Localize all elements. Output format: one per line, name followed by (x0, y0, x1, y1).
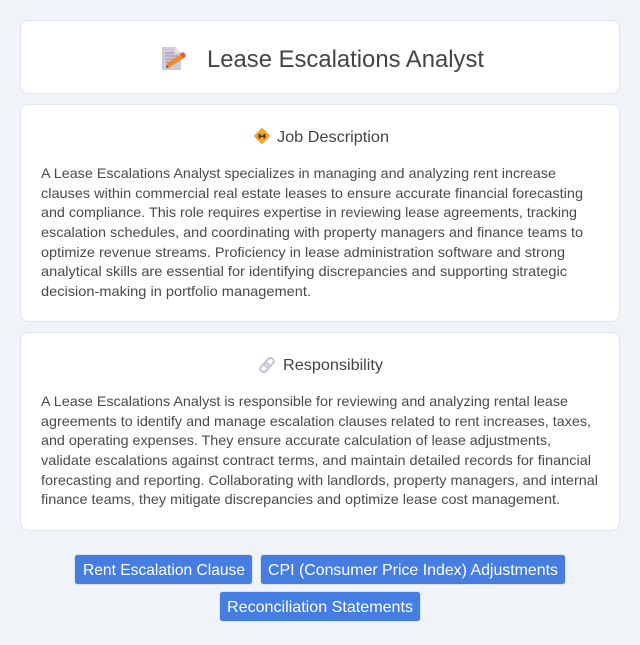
text block: job description: escalation schedules, and coordinating with property managers and finance teams to (41, 224, 583, 240)
text block: responsibility: agreements to identify and manage escalation clauses related to rent increases, taxes, (41, 413, 591, 429)
text block: responsibility: validate escalations against contract terms, and maintain detailed records for financial (41, 452, 591, 468)
icon: document with pencil (162, 47, 186, 70)
text block: responsibility: and operating expenses. They ensure accurate calculation of lease adjustments, (41, 432, 551, 448)
tag: rent escalation clause (74, 554, 252, 584)
panel: responsibility (20, 332, 620, 530)
text block: responsibility: forecasting and reporting. Collaborating with landlords, property managers, and internal (41, 472, 598, 488)
panel: title (20, 20, 620, 94)
text block: job description: decision-making in portfolio management. (41, 283, 311, 299)
text block: responsibility (41, 393, 598, 507)
text block: job description: A Lease Escalations Analyst specializes in managing and analyzing rent increase (41, 165, 556, 181)
icon: orange diamond (254, 128, 270, 144)
text block: job description: analytical skills are essential for identifying discrepancies and supporting strategic (41, 263, 567, 279)
tag: reconciliation statements: Reconciliation Statements (227, 599, 413, 616)
text block: job description (41, 165, 583, 299)
text block: responsibility: finance teams, they mitigate discrepancies and optimize lease cost management. (41, 491, 560, 507)
text block: job description: clauses within commercial real estate leases to ensure accurate financial forecasting (41, 185, 583, 201)
text block: job description: optimize revenue streams. Proficiency in lease administration software and strong (41, 244, 565, 260)
heading: job description: Job Description (277, 129, 389, 146)
icon: chain link (259, 357, 275, 373)
panel: job description (20, 104, 620, 322)
heading: title: Lease Escalations Analyst (207, 46, 484, 73)
tag: reconciliation statements (220, 592, 420, 622)
tag: rent escalation clause: Rent Escalation Clause (83, 562, 245, 579)
text block: job description: and compliance. This role requires expertise in reviewing lease agreements, tracking (41, 204, 577, 220)
tag: cpi adjustments: CPI (Consumer Price Index) Adjustments (268, 562, 558, 579)
heading: responsibility: Responsibility (283, 357, 383, 374)
tag: cpi adjustments (260, 554, 566, 584)
text block: responsibility: A Lease Escalations Analyst is responsible for reviewing and analyzing rental lease (41, 393, 568, 409)
